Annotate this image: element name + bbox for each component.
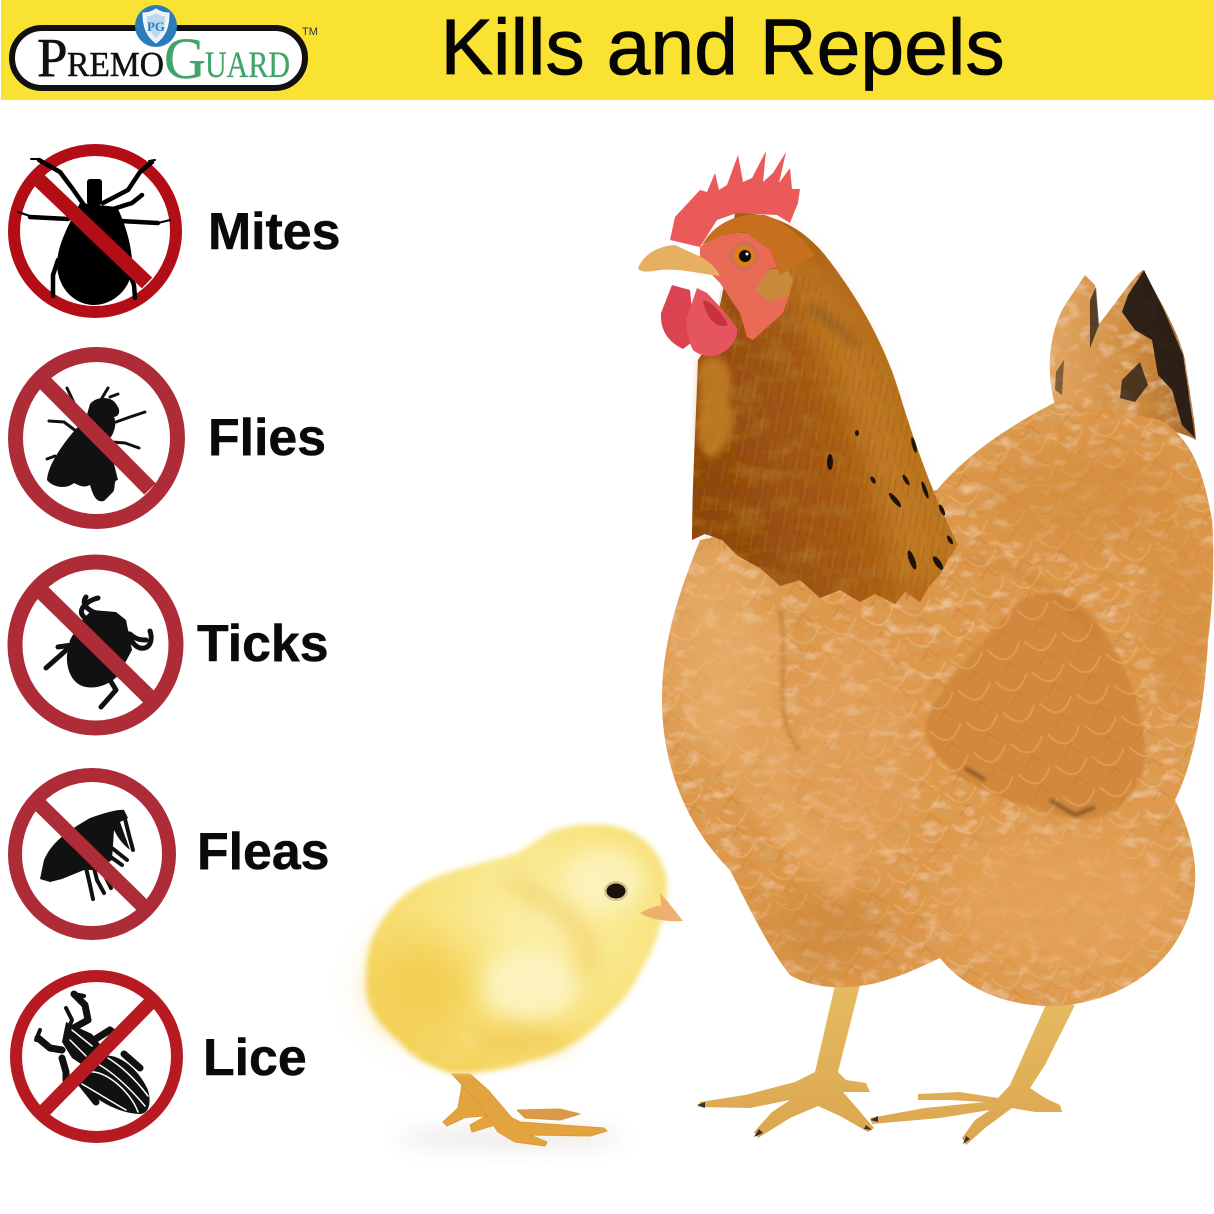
logo: PremoGuard: G bbox=[164, 26, 206, 91]
hen legs and feet bbox=[697, 985, 1075, 1145]
chick bbox=[366, 824, 683, 1150]
hen wing bbox=[925, 560, 1145, 820]
label: Mites: Mites bbox=[208, 202, 340, 260]
icon: no lice bbox=[16, 976, 177, 1137]
chick beak bbox=[640, 893, 683, 921]
chick legs bbox=[443, 1074, 607, 1146]
chick shadow bbox=[395, 1126, 625, 1150]
hen neck highlight and spots bbox=[697, 225, 958, 602]
logo: PremoGuard bbox=[12, 5, 318, 91]
icon: no fleas bbox=[15, 775, 169, 933]
icon: no mites bbox=[14, 150, 176, 312]
icon: no ticks bbox=[15, 562, 176, 728]
logo: PremoGuard: P bbox=[37, 27, 68, 88]
ear patch bbox=[755, 267, 793, 302]
crown bbox=[702, 214, 815, 275]
eye bbox=[730, 242, 758, 270]
comb bbox=[670, 151, 800, 247]
wattles bbox=[661, 285, 737, 356]
logo: PremoGuard: TM bbox=[302, 26, 318, 38]
icon: no flies bbox=[16, 354, 178, 522]
logo: PremoGuard: REMO bbox=[67, 45, 164, 84]
hen neck bbox=[692, 213, 958, 604]
title: Kills and Repels bbox=[440, 3, 1005, 91]
face bbox=[700, 233, 790, 340]
header band bbox=[1, 0, 1214, 100]
chick eye bbox=[604, 881, 628, 901]
logo: PremoGuard: UARD bbox=[205, 45, 290, 86]
label: Lice: Lice bbox=[203, 1028, 307, 1086]
chick shading bbox=[375, 848, 645, 1054]
logo: PremoGuard: PG bbox=[147, 19, 165, 34]
label: Fleas: Fleas bbox=[197, 822, 329, 880]
beak bbox=[638, 245, 720, 276]
hen body bbox=[662, 400, 1213, 1006]
hen head bbox=[638, 151, 815, 356]
hen bbox=[638, 151, 1214, 1145]
hen tail bbox=[1050, 270, 1196, 440]
chick body bbox=[366, 824, 667, 1073]
label: Flies: Flies bbox=[208, 408, 326, 466]
label: Ticks: Ticks bbox=[197, 614, 329, 672]
hen plumage shading bbox=[660, 400, 1214, 1010]
